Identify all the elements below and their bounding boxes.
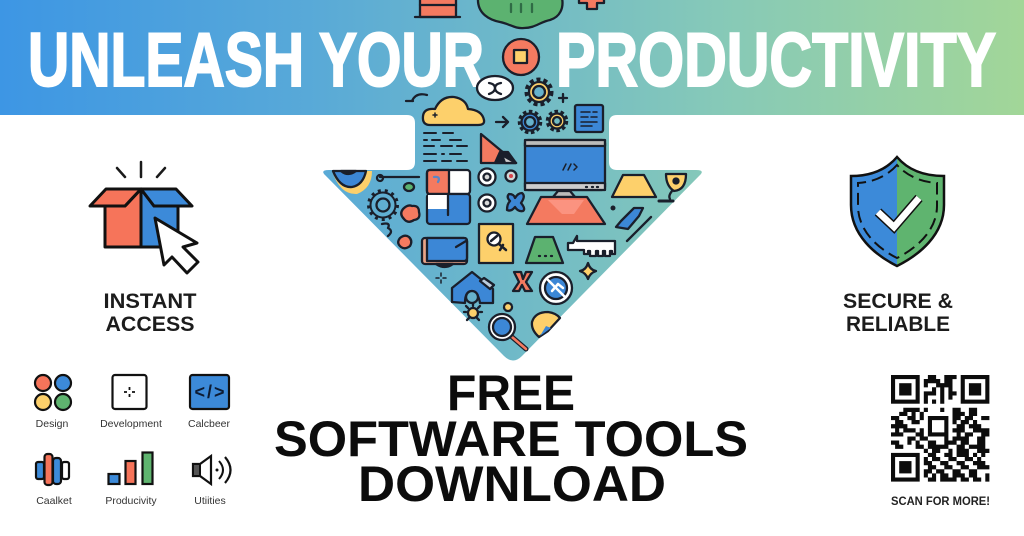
label: instant access (104, 289, 196, 336)
icon: green trapezoid (526, 237, 563, 263)
feature: instant access (90, 162, 198, 336)
icon: red circle with square (503, 39, 539, 75)
icon: house (452, 272, 494, 303)
icon: shield (851, 157, 944, 266)
icon: code (190, 375, 229, 409)
icon: colour squares (427, 170, 470, 224)
icon: tablet (422, 238, 467, 267)
icon: outline gear (368, 190, 398, 220)
icon: bar chart (108, 452, 152, 484)
icon: development (112, 375, 146, 409)
QR code (891, 377, 989, 480)
icon: half circle corner (332, 171, 372, 194)
headline: free software tools download: FREE (447, 365, 575, 421)
icon: open box (90, 189, 192, 247)
icon: key line (377, 175, 419, 191)
arrow icon collage (332, 0, 686, 349)
icon: red box top (415, 0, 460, 17)
label: secure and reliable (843, 289, 953, 336)
icon: code: </> (194, 382, 224, 402)
label: secure and reliable: SECURE & (843, 289, 953, 313)
icon: squiggle (382, 224, 391, 236)
label: instant access: ACCESS (106, 312, 194, 336)
icon: small yellow gear (548, 112, 566, 130)
QR caption: SCAN FOR MORE! (891, 494, 990, 508)
category labels (36, 418, 231, 507)
category labels: Design (36, 418, 69, 430)
icon: speaker (193, 456, 230, 484)
banner and download arrow (0, 0, 1024, 360)
icon: arrow right (496, 117, 508, 127)
title: UNLEASH YOUR (28, 18, 484, 103)
icon: no-entry circle (540, 272, 572, 304)
icon: text lines (424, 133, 467, 161)
icon: pie (532, 312, 560, 337)
category icon grid (35, 375, 231, 507)
icon: cursor (155, 218, 198, 273)
icon: blue pencil (610, 206, 651, 241)
category labels: Utiities (194, 495, 226, 507)
icon: white comb (568, 236, 615, 256)
feature: secure and reliable (843, 157, 953, 336)
icon: rays (117, 162, 165, 177)
icon: blue cross shape (507, 193, 524, 211)
icon: red X (513, 272, 532, 291)
category labels: Calcbeer (188, 418, 231, 430)
icon: yellow trapezoid (612, 175, 656, 197)
icon: small yellow sun (504, 303, 512, 311)
category labels: Development (100, 418, 162, 430)
headline: free software tools download (274, 365, 748, 512)
icon: red triangle (481, 134, 516, 163)
icon: design (35, 375, 71, 410)
icon: white oval (477, 76, 513, 100)
icon: red blobs (398, 205, 419, 248)
icon: sun (464, 304, 482, 320)
label: secure and reliable: RELIABLE (846, 312, 950, 336)
icon: yellow gear (526, 80, 552, 104)
headline: free software tools download: DOWNLOAD (358, 456, 666, 512)
icon: sparkle (436, 273, 446, 283)
category labels: Producivity (105, 495, 157, 507)
icon: yellow star (580, 263, 596, 279)
icon: monitor (525, 140, 605, 190)
icon: targets (478, 168, 516, 212)
headline: free software tools download: SOFTWARE TOOLS (274, 411, 748, 467)
label: instant access: INSTANT (104, 289, 196, 313)
icon: red cross (579, 0, 604, 9)
icon: lamp (659, 174, 686, 201)
icon: curved arrow (406, 94, 427, 101)
title (28, 18, 996, 103)
icon: plus (559, 94, 567, 102)
icon: blue gear (520, 112, 540, 132)
icon: monitor stand (527, 191, 605, 224)
icon: green blob (478, 0, 562, 28)
icon: yellow document (479, 224, 513, 263)
category labels: Caalket (36, 495, 72, 507)
icon: bars (36, 454, 69, 485)
icon: blue document (575, 105, 603, 132)
icon: cloud (423, 97, 484, 125)
icon: magnifier (489, 314, 526, 349)
